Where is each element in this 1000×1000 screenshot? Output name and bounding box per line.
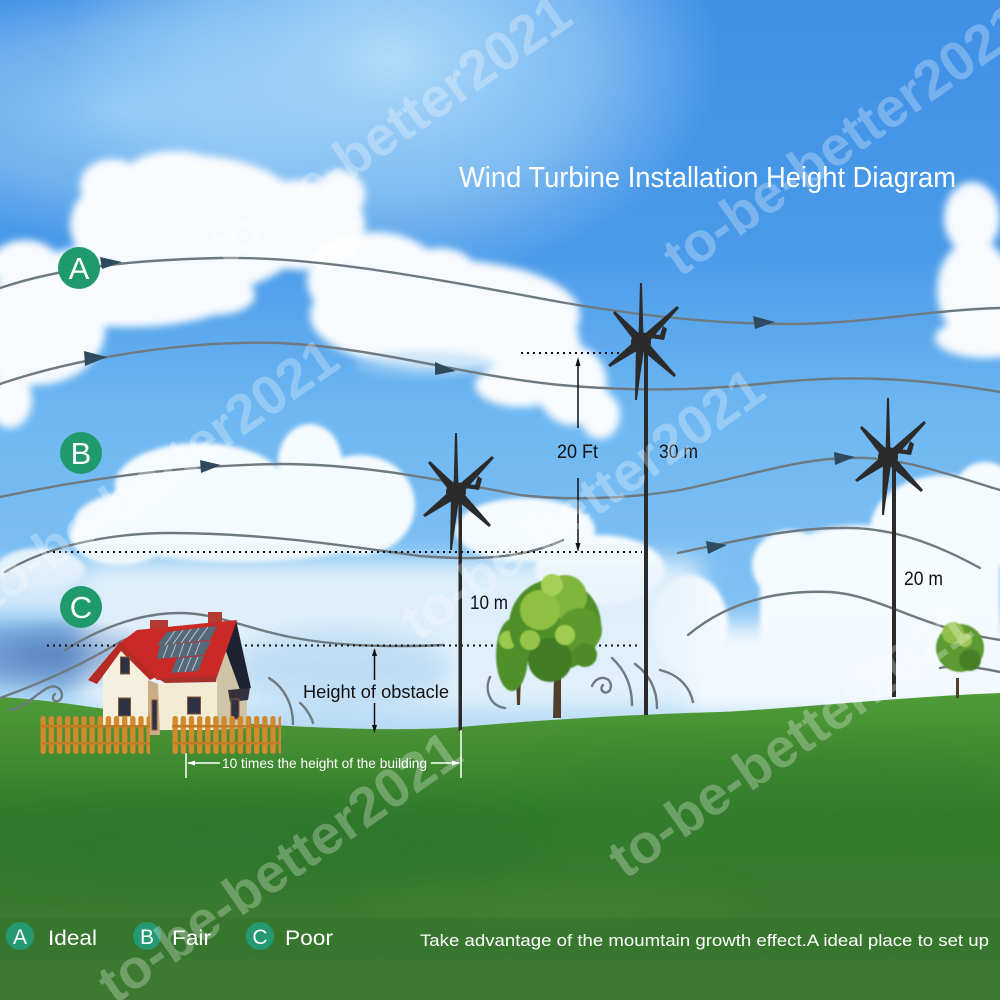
legend: Ideal: A: [13, 926, 27, 949]
legend: Ideal: Ideal: [48, 927, 97, 950]
gable roof: [88, 642, 156, 684]
legend: Poor: [246, 922, 333, 950]
obstacle height marker: Height of obstacle: [303, 682, 449, 702]
clouds: [0, 151, 1000, 715]
gable wall: [103, 648, 148, 727]
cloud: horizon haze: [0, 560, 1000, 715]
legend: Fair: B: [140, 926, 154, 949]
cloud: middle left: [0, 424, 415, 592]
zone badge A: A: [69, 251, 90, 286]
legend: Poor: Poor: [285, 927, 333, 950]
ground: [0, 693, 1000, 1000]
turbine: 20 m: [855, 398, 926, 697]
cloud: upper left: [0, 151, 365, 428]
watermarks: to-be-better2021: [389, 356, 775, 652]
turbine height labels: 10 m: [470, 593, 508, 614]
20 ft height marker: 20 Ft: [557, 442, 599, 463]
turbine height labels: 20 m: [904, 569, 943, 590]
dotted reference lines: [47, 353, 642, 646]
right fence: [172, 716, 281, 754]
zone badge C: [60, 586, 102, 628]
turbine: 30 m: [608, 283, 679, 715]
20 ft height marker: [557, 357, 599, 552]
windows: [118, 657, 239, 730]
building distance marker: 10 times the height of the building: [222, 755, 427, 771]
zone badge B: [60, 432, 102, 474]
legend: Ideal: [6, 922, 97, 950]
turbine height labels: 30 m: [659, 442, 698, 463]
large tree: [496, 574, 602, 718]
front wall: [148, 683, 217, 730]
zone badge C: C: [70, 590, 92, 625]
legend band: [0, 918, 1000, 959]
roof band: [157, 676, 217, 683]
obstacle height marker: [303, 648, 449, 733]
footer note: Take advantage of the moumtain growth effect.A ideal place to set up: [420, 931, 989, 950]
turbine height labels: [470, 442, 943, 614]
wind flow lines: [0, 258, 1000, 724]
cloud: middle right: [455, 462, 1000, 675]
zone badge A: [58, 247, 100, 289]
house: [88, 612, 251, 735]
side wall: [217, 630, 247, 730]
zone badge B: B: [71, 436, 91, 471]
legend: Poor: C: [252, 926, 268, 949]
cloud: right edge: [935, 182, 1000, 358]
left fence: [40, 716, 150, 754]
legend: Fair: [133, 922, 211, 950]
fence: [40, 716, 281, 754]
cloud: centre: [307, 232, 620, 439]
title: Wind Turbine Installation Height Diagram: [459, 162, 956, 194]
flow arrowheads: [84, 257, 855, 554]
turbine: 10 m: [423, 433, 494, 731]
building distance marker: [186, 730, 461, 778]
main roof: [120, 620, 237, 680]
watermarks: to-be-better2021: [596, 594, 982, 890]
legend: Fair: Fair: [172, 927, 211, 950]
solar panels: [157, 626, 217, 673]
small tree: [936, 622, 984, 698]
cloud: centre shading: [355, 351, 495, 379]
chimneys: [150, 612, 222, 630]
